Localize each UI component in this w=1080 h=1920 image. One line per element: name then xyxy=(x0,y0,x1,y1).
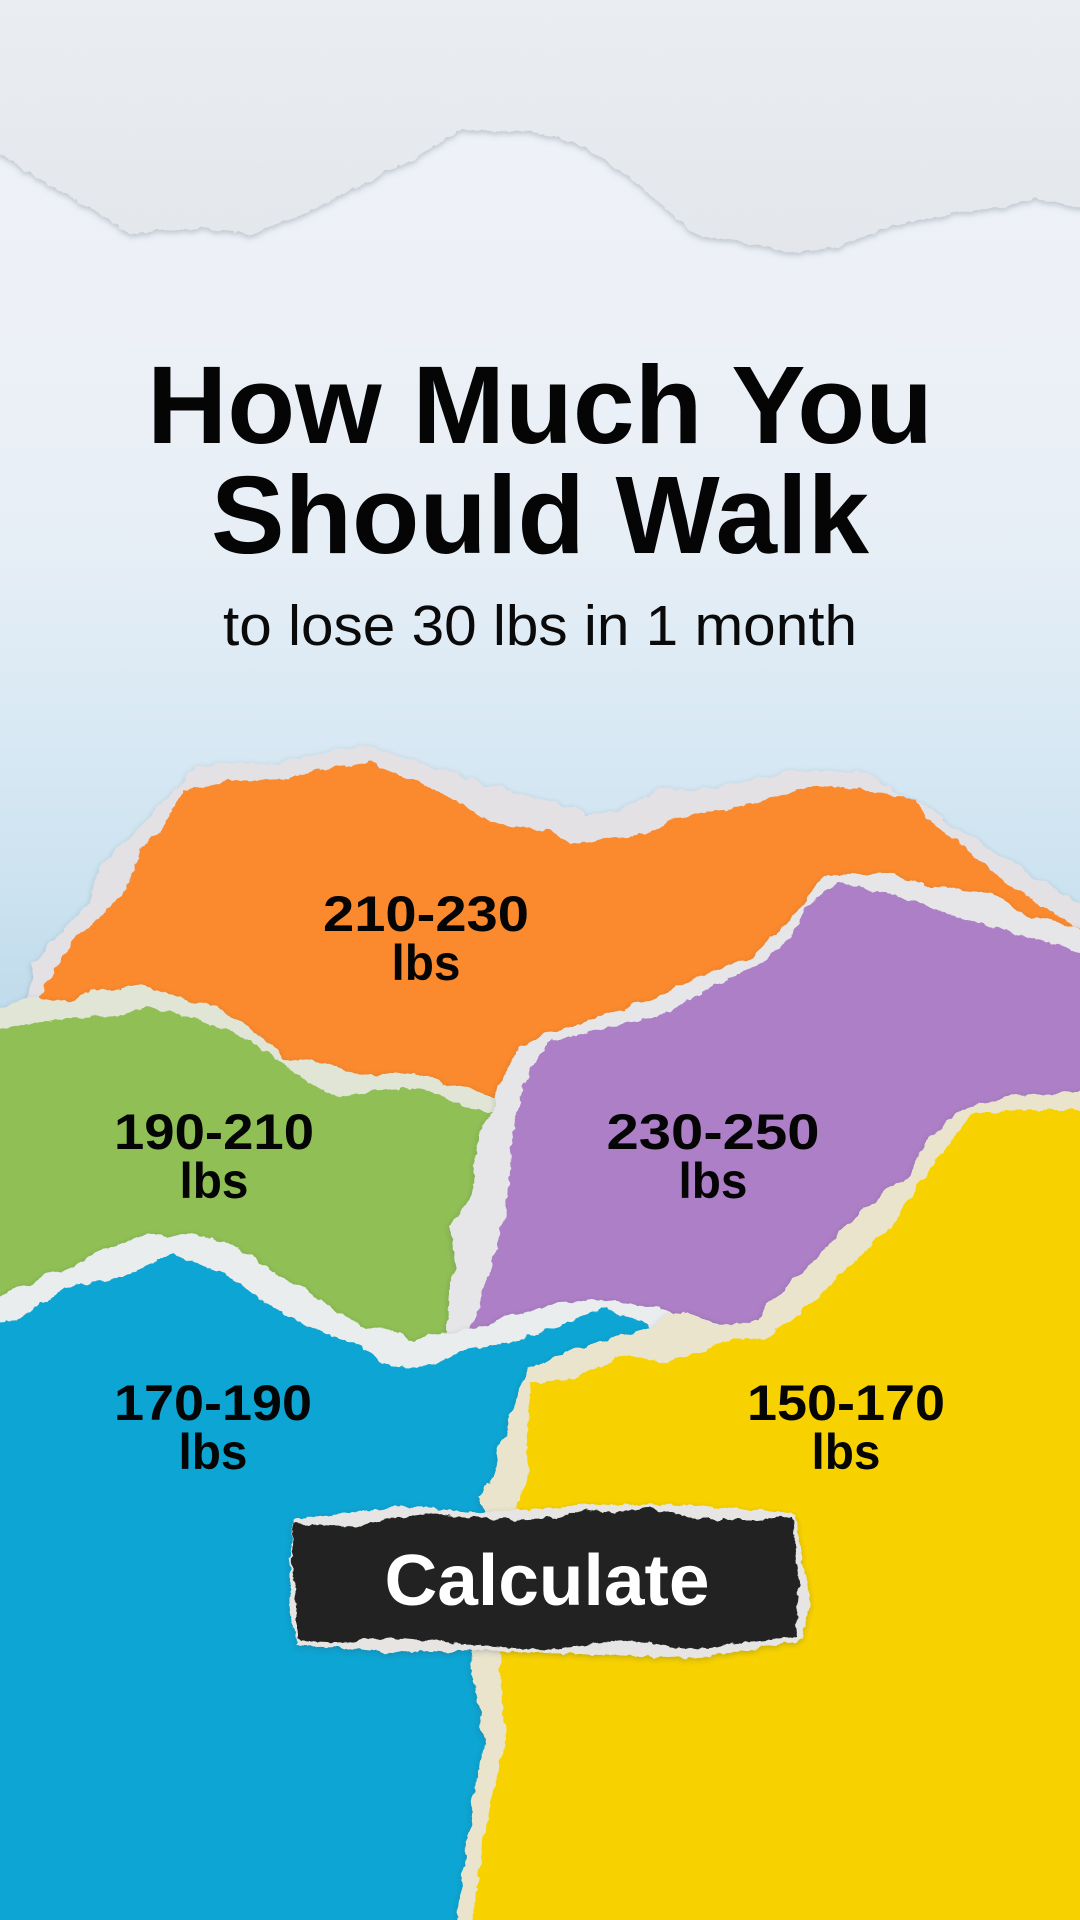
panel: green paper xyxy=(0,986,600,1500)
title: How Much You xyxy=(147,344,933,467)
label: 150-170 lbs xyxy=(747,1375,945,1480)
subtitle: to lose 30 lbs in 1 month xyxy=(223,594,857,658)
label: 230-250 lbs: 230-250 xyxy=(606,1104,820,1160)
label: 190-210 lbs: lbs xyxy=(180,1153,248,1209)
panel: purple paper xyxy=(446,873,1080,1450)
button torn paper xyxy=(290,1503,810,1658)
button: calculate xyxy=(290,1503,810,1658)
label: 170-190 lbs: lbs xyxy=(178,1424,248,1480)
title xyxy=(147,344,933,577)
label: 150-170 lbs: 150-170 xyxy=(747,1375,945,1431)
label: 170-190 lbs: 170-190 xyxy=(114,1375,312,1431)
label: 170-190 lbs xyxy=(114,1375,312,1480)
label: 210-230 lbs: 210-230 xyxy=(323,886,529,942)
label: 230-250 lbs xyxy=(606,1104,820,1209)
title: Should Walk xyxy=(211,454,870,577)
label: 150-170 lbs: lbs xyxy=(812,1424,880,1480)
label: 190-210 lbs xyxy=(114,1104,314,1209)
label: 190-210 lbs: 190-210 xyxy=(114,1104,314,1160)
label: 210-230 lbs: lbs xyxy=(392,935,460,991)
button label: Calculate xyxy=(384,1541,710,1621)
panel: orange paper xyxy=(26,745,1080,1150)
label: 230-250 lbs: lbs xyxy=(678,1153,748,1209)
panel: yellow paper xyxy=(453,1085,1080,1920)
label: 210-230 lbs xyxy=(323,886,529,991)
torn top paper strip xyxy=(0,0,1080,252)
panel: blue paper xyxy=(0,1233,770,1920)
